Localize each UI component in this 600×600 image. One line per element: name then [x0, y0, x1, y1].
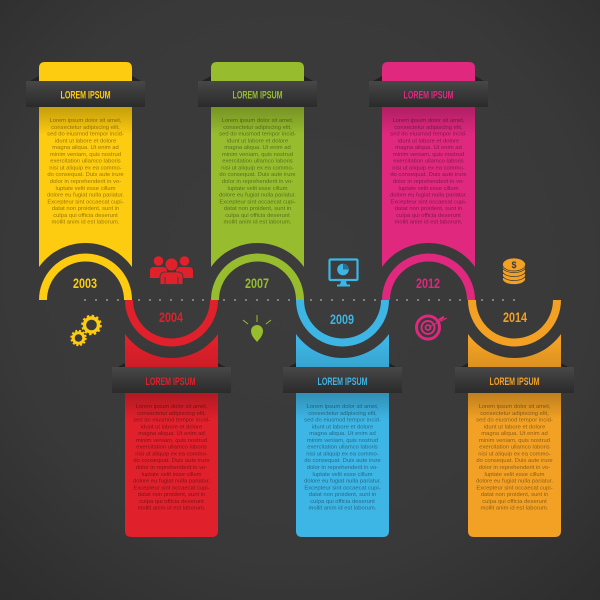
- body text: culpa qui officia deserunt: [225, 213, 290, 219]
- body text: datat non proident, sunt in: [395, 206, 462, 212]
- body text: datat non proident, sunt in: [224, 206, 291, 212]
- body text: idunt ut labore et dolore: [484, 424, 545, 430]
- body text: luptate velit esse cillum: [55, 186, 116, 192]
- body text: consectetur adipiscing elit,: [480, 411, 549, 417]
- heading: LOREM IPSUM: [232, 90, 282, 102]
- year 2014: 2014: [503, 310, 527, 325]
- body text: sed do eiusmod tempor incid-: [133, 418, 210, 424]
- banner: [369, 81, 488, 107]
- panel: 2007 green: [198, 62, 317, 267]
- body text: mollit anim id est laborum.: [309, 506, 377, 512]
- body text: exercitation ullamco laboris: [393, 159, 464, 165]
- body text: dolor in reprehenderit in vo-: [50, 179, 121, 185]
- body text: dolor in reprehenderit in vo-: [307, 465, 378, 471]
- body text: idunt ut labore et dolore: [227, 138, 288, 144]
- body text: minim veniam, quis nostrud: [307, 438, 378, 444]
- body text: sed do eiusmod tempor incid-: [476, 418, 553, 424]
- body text: mollit anim id est laborum.: [138, 506, 206, 512]
- body text: luptate velit esse cillum: [312, 472, 373, 478]
- body text: mollit anim id est laborum.: [481, 506, 549, 512]
- body text: Excepteur sint occaecat cupi-: [219, 199, 296, 205]
- body text: do consequat. Duis aute irure: [476, 458, 553, 464]
- year 2007: 2007: [245, 276, 269, 291]
- panel: 2014 orange: [455, 334, 574, 537]
- body text: dolor in reprehenderit in vo-: [136, 465, 207, 471]
- body text: consectetur adipiscing elit,: [308, 411, 377, 417]
- banner: [26, 81, 145, 107]
- icon: coins: [502, 258, 526, 284]
- body text: do consequat. Duis aute irure: [219, 172, 296, 178]
- body text: luptate velit esse cillum: [227, 186, 288, 192]
- body text: dolor in reprehenderit in vo-: [393, 179, 464, 185]
- banner: [283, 367, 402, 393]
- body text: mollit anim id est laborum.: [224, 220, 292, 226]
- body text: nisi ut aliquip ex ea commo-: [49, 165, 122, 171]
- heading: LOREM IPSUM: [490, 376, 540, 388]
- body text: Lorem ipsum dolor sit amet,: [478, 404, 551, 410]
- banner: [112, 367, 231, 393]
- body text: consectetur adipiscing elit,: [137, 411, 206, 417]
- body text: sed do eiusmod tempor incid-: [304, 418, 381, 424]
- body text: magna aliqua. Ut enim ad: [138, 431, 205, 437]
- body text: nisi ut aliquip ex ea commo-: [306, 451, 379, 457]
- body text: magna aliqua. Ut enim ad: [309, 431, 376, 437]
- body text: idunt ut labore et dolore: [398, 138, 459, 144]
- body text: idunt ut labore et dolore: [141, 424, 202, 430]
- body text: do consequat. Duis aute irure: [390, 172, 467, 178]
- body text: datat non proident, sunt in: [309, 492, 376, 498]
- body text: culpa qui officia deserunt: [139, 499, 204, 505]
- body text: dolore eu fugiat nulla pariatur.: [304, 479, 381, 485]
- body text: minim veniam, quis nostrud: [136, 438, 207, 444]
- body text: minim veniam, quis nostrud: [393, 152, 464, 158]
- body text: minim veniam, quis nostrud: [50, 152, 121, 158]
- icon: coins: $: [511, 260, 517, 270]
- banner: [455, 367, 574, 393]
- body text: datat non proident, sunt in: [138, 492, 205, 498]
- body text: sed do eiusmod tempor incid-: [47, 132, 124, 138]
- body text: minim veniam, quis nostrud: [222, 152, 293, 158]
- body text: dolore eu fugiat nulla pariatur.: [390, 193, 467, 199]
- icon: people: [150, 256, 193, 284]
- body text: nisi ut aliquip ex ea commo-: [478, 451, 551, 457]
- body text: luptate velit esse cillum: [398, 186, 459, 192]
- panel: 2004 red: [112, 334, 231, 537]
- icon: monitor with chart: [330, 260, 358, 286]
- icon: target: [416, 316, 447, 339]
- year 2012: 2012: [416, 276, 440, 291]
- body text: exercitation ullamco laboris: [307, 445, 378, 451]
- body text: exercitation ullamco laboris: [50, 159, 121, 165]
- body text: dolor in reprehenderit in vo-: [222, 179, 293, 185]
- year 2003: 2003: [73, 276, 97, 291]
- body text: nisi ut aliquip ex ea commo-: [135, 451, 208, 457]
- body text: exercitation ullamco laboris: [222, 159, 293, 165]
- body text: culpa qui officia deserunt: [396, 213, 461, 219]
- body text: magna aliqua. Ut enim ad: [481, 431, 548, 437]
- body text: Excepteur sint occaecat cupi-: [47, 199, 124, 205]
- panel: 2003 yellow: [26, 62, 145, 267]
- heading: LOREM IPSUM: [318, 376, 368, 388]
- body text: exercitation ullamco laboris: [479, 445, 550, 451]
- panel: 2009 blue: [283, 334, 402, 537]
- body text: minim veniam, quis nostrud: [479, 438, 550, 444]
- body text: luptate velit esse cillum: [484, 472, 545, 478]
- body text: Lorem ipsum dolor sit amet,: [221, 118, 294, 124]
- body text: do consequat. Duis aute irure: [133, 458, 210, 464]
- body text: sed do eiusmod tempor incid-: [219, 132, 296, 138]
- heading: LOREM IPSUM: [404, 90, 454, 102]
- body text: Excepteur sint occaecat cupi-: [304, 485, 381, 491]
- body text: idunt ut labore et dolore: [312, 424, 373, 430]
- body text: exercitation ullamco laboris: [136, 445, 207, 451]
- body text: Excepteur sint occaecat cupi-: [476, 485, 553, 491]
- body text: consectetur adipiscing elit,: [51, 125, 120, 131]
- panel: 2012 pink: [369, 62, 488, 267]
- year 2004: 2004: [159, 310, 183, 325]
- body text: do consequat. Duis aute irure: [47, 172, 124, 178]
- body text: magna aliqua. Ut enim ad: [395, 145, 462, 151]
- body text: nisi ut aliquip ex ea commo-: [221, 165, 294, 171]
- heading: LOREM IPSUM: [146, 376, 196, 388]
- body text: nisi ut aliquip ex ea commo-: [392, 165, 465, 171]
- body text: Lorem ipsum dolor sit amet,: [135, 404, 208, 410]
- year 2009: 2009: [330, 312, 354, 327]
- body text: Excepteur sint occaecat cupi-: [390, 199, 467, 205]
- timeline arcs: [43, 258, 557, 342]
- body text: magna aliqua. Ut enim ad: [224, 145, 291, 151]
- body text: Lorem ipsum dolor sit amet,: [306, 404, 379, 410]
- body text: Lorem ipsum dolor sit amet,: [392, 118, 465, 124]
- body text: consectetur adipiscing elit,: [223, 125, 292, 131]
- body text: dolore eu fugiat nulla pariatur.: [47, 193, 124, 199]
- body text: mollit anim id est laborum.: [395, 220, 463, 226]
- body text: dolore eu fugiat nulla pariatur.: [476, 479, 553, 485]
- body text: dolor in reprehenderit in vo-: [479, 465, 550, 471]
- body text: Excepteur sint occaecat cupi-: [133, 485, 210, 491]
- icon: gears: [71, 316, 101, 345]
- body text: culpa qui officia deserunt: [310, 499, 375, 505]
- body text: mollit anim id est laborum.: [52, 220, 120, 226]
- body text: idunt ut labore et dolore: [55, 138, 116, 144]
- body text: culpa qui officia deserunt: [482, 499, 547, 505]
- icon: light bulb: [243, 315, 271, 342]
- body text: sed do eiusmod tempor incid-: [390, 132, 467, 138]
- body text: magna aliqua. Ut enim ad: [52, 145, 119, 151]
- body text: datat non proident, sunt in: [52, 206, 119, 212]
- body text: datat non proident, sunt in: [481, 492, 548, 498]
- body text: culpa qui officia deserunt: [53, 213, 118, 219]
- body text: Lorem ipsum dolor sit amet,: [49, 118, 122, 124]
- body text: do consequat. Duis aute irure: [304, 458, 381, 464]
- banner: [198, 81, 317, 107]
- timeline dotted line: [84, 299, 515, 301]
- body text: dolore eu fugiat nulla pariatur.: [219, 193, 296, 199]
- heading: LOREM IPSUM: [60, 90, 110, 102]
- body text: luptate velit esse cillum: [141, 472, 202, 478]
- body text: dolore eu fugiat nulla pariatur.: [133, 479, 210, 485]
- body text: consectetur adipiscing elit,: [394, 125, 463, 131]
